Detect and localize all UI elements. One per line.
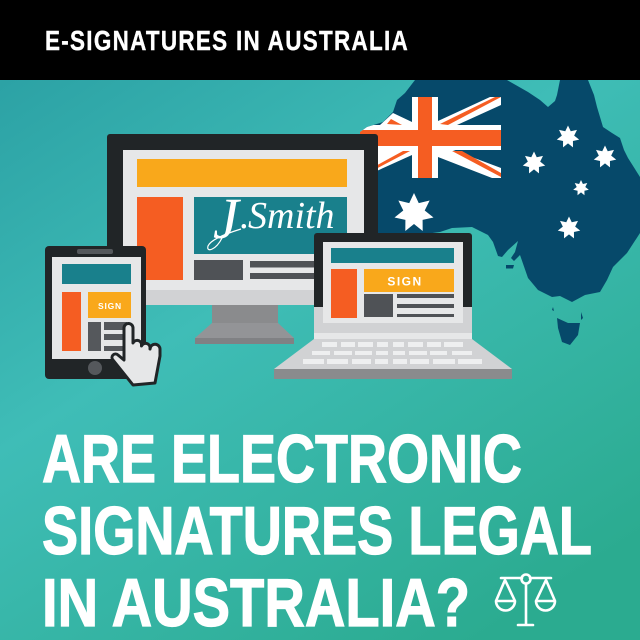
icon: scales of justice [496, 574, 555, 625]
header title: E-SIGNATURES IN AUSTRALIA [45, 25, 409, 56]
headline: IN AUSTRALIA? [42, 565, 470, 640]
headline: ARE ELECTRONIC [42, 421, 522, 497]
icon: desktop monitor [107, 134, 378, 344]
signature [208, 186, 335, 251]
southern cross stars [394, 126, 616, 238]
signature: . [240, 195, 259, 237]
map: Tasmania and islands [506, 265, 583, 345]
flag: union jack [355, 97, 501, 178]
map of Australia with flag [355, 80, 640, 345]
tablet SIGN button label: SIGN [98, 301, 122, 311]
icon: laptop [274, 233, 512, 379]
signature: J [213, 186, 242, 251]
laptop SIGN button label: SIGN [387, 274, 423, 288]
header bar [0, 0, 640, 80]
headline [42, 421, 592, 640]
icon: tablet [45, 246, 146, 379]
map: mainland [360, 80, 640, 302]
keyboard keys [303, 342, 482, 364]
icon: pointing hand cursor [112, 324, 160, 385]
signature: Smith [248, 195, 335, 237]
